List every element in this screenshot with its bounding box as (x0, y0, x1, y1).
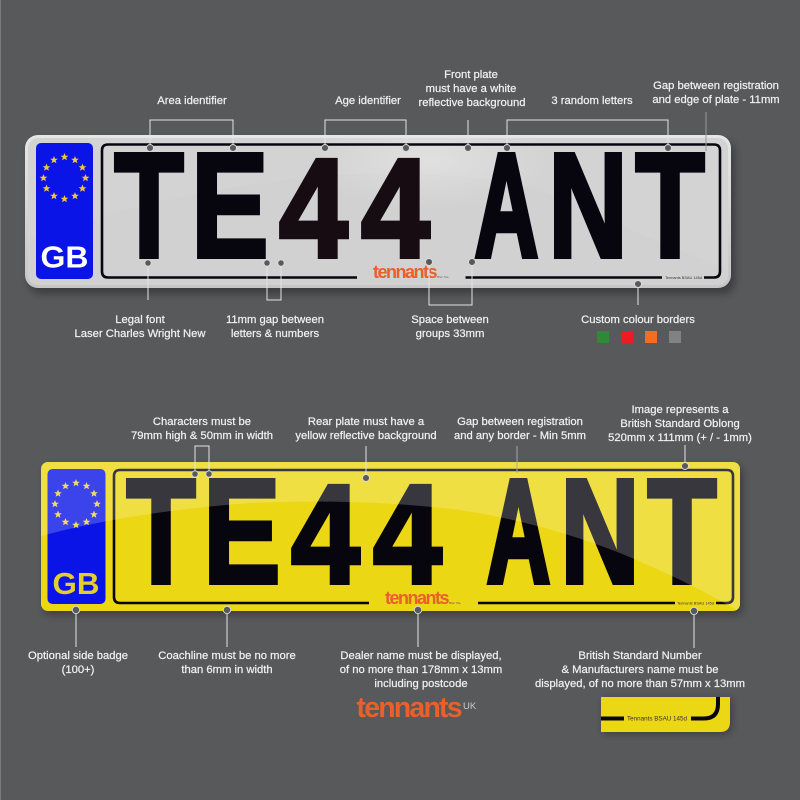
detail: British Standard mark enlarged (601, 697, 732, 734)
callout: gap to edge of plate (652, 80, 780, 151)
rear dealer logo: BS2 7GL (449, 601, 462, 605)
callout: optional side badge: (100+) (62, 664, 95, 676)
rear side badge (48, 469, 106, 604)
tennants UK logo: UK (463, 701, 477, 712)
callout: 3 random letters (504, 95, 672, 152)
callout: British Standard number (535, 607, 745, 690)
front registration characters: 4 (279, 130, 348, 288)
callout: gap to edge of plate: Gap between registration (653, 80, 779, 92)
callout: coachline width: than 6mm in width (181, 664, 273, 676)
rear registration characters: 4 (291, 456, 360, 614)
front coachline (102, 144, 720, 278)
callout: character size (131, 416, 273, 477)
callout: dealer name: Dealer name must be displayed, (340, 650, 502, 662)
front registration characters: T (635, 123, 705, 290)
callout: dealer name (340, 606, 502, 690)
front registration characters: N (548, 121, 628, 289)
callout: British Standard Oblong: Image represents a (632, 404, 729, 416)
callout: British Standard number: displayed, of no more than 57mm x 13mm (535, 678, 745, 690)
EU stars front (40, 153, 89, 202)
EU stars rear (51, 479, 101, 528)
rear registration characters: 4 (373, 456, 442, 614)
callout: area identifier: Area identifier (157, 95, 227, 107)
callout: front plate background (419, 69, 525, 152)
callout: gap to border: Gap between registration (457, 416, 583, 428)
callout: space between groups (411, 258, 489, 340)
callout: British Standard Oblong (608, 404, 752, 470)
callout: 11mm gap: 11mm gap between (226, 314, 324, 326)
rear registration characters: T (126, 449, 196, 616)
rear plate (41, 447, 743, 616)
callout: British Standard Oblong: 520mm x 111mm (+ / - 1mm) (608, 432, 752, 444)
front plate gloss (369, 138, 491, 179)
callout: area identifier (146, 95, 236, 152)
GB yellow: GB (52, 566, 100, 601)
callout: legal font: Laser Charles Wright New (74, 328, 206, 340)
GB white: GB (40, 240, 88, 274)
rear registration characters: N (560, 447, 640, 615)
rear registration characters: A (487, 450, 550, 614)
front side badge (36, 143, 93, 279)
front British Standard mark: Tennants BSAU 145d (665, 276, 702, 280)
front registration characters (114, 121, 705, 290)
rear dealer logo: tennants (385, 588, 449, 608)
callout: custom colour borders: Custom colour borders (581, 314, 695, 326)
tennants UK logo: tennants (356, 692, 462, 724)
front dealer logo: BS2 7GL (437, 275, 450, 279)
front registration characters: A (475, 124, 538, 288)
callout: age identifier (322, 95, 410, 152)
callout: gap to edge of plate: and edge of plate - 11mm (652, 94, 780, 106)
callout: dealer name: including postcode (374, 678, 468, 690)
callout: 11mm gap: letters & numbers (231, 328, 319, 340)
callout: front plate background: must have a white (426, 83, 516, 95)
front registration characters: E (191, 122, 269, 289)
front registration characters: 4 (361, 130, 430, 288)
callout: custom colour borders (581, 280, 695, 343)
callout: coachline width: Coachline must be no more (158, 650, 296, 662)
callout: coachline width (158, 606, 296, 676)
callout: optional side badge (28, 606, 128, 676)
callout: rear plate background (295, 416, 437, 482)
callout: rear plate background: Rear plate must have a (308, 416, 425, 428)
callout: British Standard Oblong: British Standard Oblong (620, 418, 740, 430)
callout: dealer name: of no more than 178mm x 13mm (340, 664, 502, 676)
callout: gap to border (454, 416, 586, 473)
callout: British Standard number: British Standard Number (578, 650, 702, 662)
callout: British Standard number: & Manufacturers name must be (562, 664, 718, 676)
callout: age identifier: Age identifier (335, 95, 401, 107)
callout: character size: Characters must be (153, 416, 251, 428)
rear coachline (114, 470, 733, 603)
callout: gap to border: and any border - Min 5mm (454, 430, 586, 442)
colour swatches (597, 331, 681, 343)
rear registration characters: E (203, 448, 281, 615)
rear registration characters (126, 447, 717, 616)
callout: legal font (74, 260, 206, 340)
callout: 3 random letters: 3 random letters (551, 95, 633, 107)
callout: space between groups: groups 33mm (416, 328, 484, 340)
callout: space between groups: Space between (411, 314, 489, 326)
callout: 11mm gap (226, 260, 324, 340)
rear British Standard mark: Tennants BSAU 145d (677, 602, 714, 606)
callout: front plate background: reflective background (419, 97, 525, 109)
front plate (25, 135, 737, 296)
detail: British Standard mark enlarged: Tennants BSAU 145d (627, 716, 687, 722)
callout: front plate background: Front plate (444, 69, 498, 81)
rear plate gloss (41, 462, 740, 612)
callout: legal font: Legal font (115, 314, 166, 326)
rear registration characters: T (647, 449, 717, 616)
callout: character size: 79mm high & 50mm in width (131, 430, 273, 442)
callout: optional side badge: Optional side badge (28, 650, 128, 662)
callout: rear plate background: yellow reflective background (295, 430, 437, 442)
front registration characters: T (114, 123, 184, 290)
front dealer logo: tennants (373, 262, 437, 282)
